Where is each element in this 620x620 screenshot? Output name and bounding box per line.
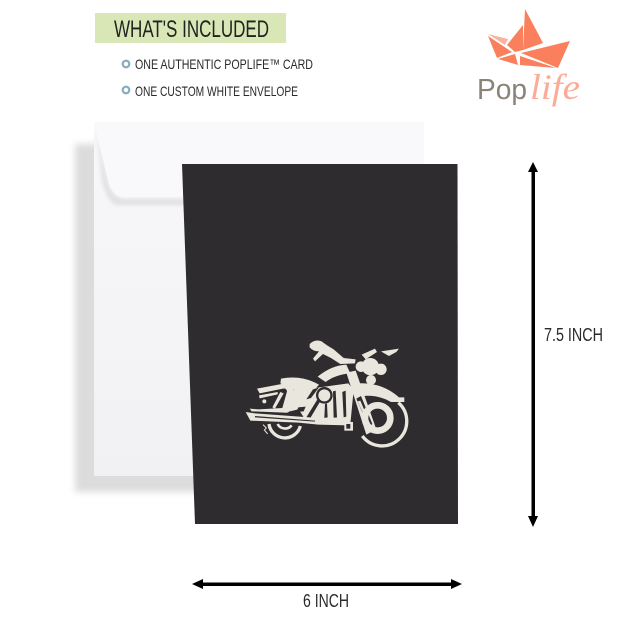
logo: Poplife: [477, 9, 580, 107]
bullet: card item: [123, 61, 129, 67]
text: envelope item: ONE CUSTOM WHITE ENVELOPE: [135, 83, 298, 99]
envelope shadow: [75, 144, 205, 492]
wordmark: Pop: Pop: [477, 74, 527, 106]
windscreen tip: [381, 349, 399, 356]
fork: [346, 371, 376, 435]
kickstand: [263, 425, 268, 434]
icon: origami boat: [488, 9, 570, 68]
handlebar: [310, 340, 356, 364]
mirror stem: [362, 349, 377, 359]
engine block: [294, 383, 354, 424]
wordmark: life: life: [530, 67, 580, 107]
heading: what's included: [95, 13, 286, 43]
text: card item: ONE AUTHENTIC POPLIFE™ CARD: [135, 56, 313, 72]
envelope flap shadow: [96, 128, 424, 205]
fender: [358, 383, 404, 402]
foot block: [344, 422, 353, 431]
envelope flap: [94, 122, 424, 197]
rear wheel: [269, 424, 300, 438]
seat and rear body: [280, 378, 319, 411]
arrow: height dimension: [528, 162, 538, 527]
headlights: [362, 358, 379, 375]
arrow: width dimension: [192, 579, 462, 589]
label: 6 inch: 6 INCH: [303, 591, 349, 611]
exhaust: [246, 412, 348, 425]
list: included items: [123, 56, 313, 99]
label: 7.5 inch: 7.5 INCH: [544, 325, 603, 345]
pop-up card: [182, 164, 458, 524]
tank: [318, 365, 350, 382]
engine cuts: [296, 387, 346, 419]
heading: what's included: WHAT'S INCLUDED: [114, 16, 269, 43]
motorcycle cutout: [246, 340, 407, 446]
front wheel: [362, 403, 407, 446]
saddlebag: [250, 383, 294, 413]
envelope: [94, 122, 424, 476]
bullet: envelope item: [123, 87, 129, 93]
